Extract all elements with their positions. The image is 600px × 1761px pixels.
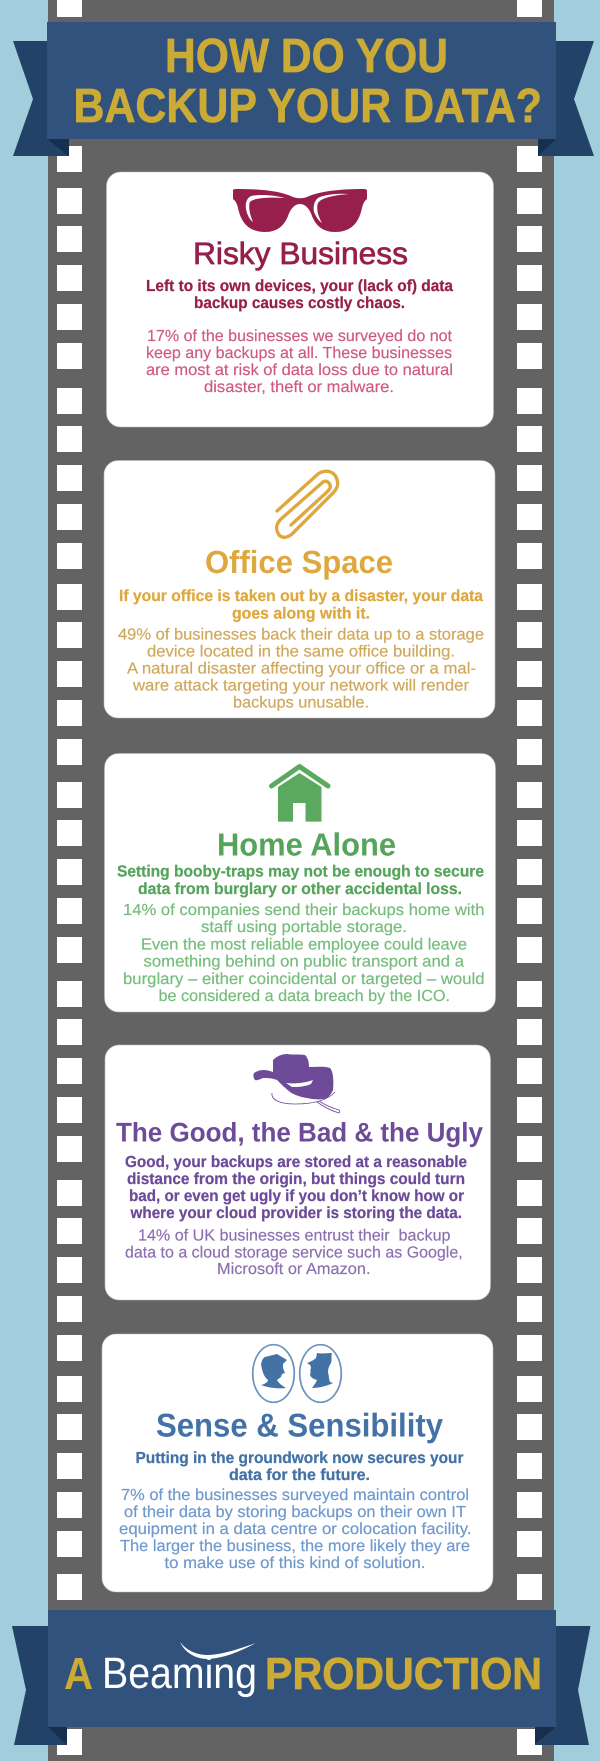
body text: Microsoft or Amazon. xyxy=(217,1261,370,1278)
intro text xyxy=(119,588,483,622)
logo: Beaming: Beaming xyxy=(102,1649,257,1698)
body text: A natural disaster affecting your office or a mal- xyxy=(127,660,476,678)
body text: 14% of UK businesses entrust their backup xyxy=(138,1228,451,1245)
intro text: distance from the origin, but things could turn xyxy=(127,1171,465,1188)
body text: backups unusable. xyxy=(233,695,369,712)
title: HOW DO YOU xyxy=(165,30,448,83)
body text: keep any backups at all. These businesses xyxy=(146,345,452,362)
heading: Home Alone xyxy=(217,827,396,863)
body text: something behind on public transport and a xyxy=(144,954,464,971)
body text: to make use of this kind of solution. xyxy=(164,1555,426,1572)
body text: are most at risk of data loss due to natural xyxy=(146,362,453,379)
intro text: Good, your backups are stored at a reasonable xyxy=(125,1154,467,1171)
intro text: backup causes costly chaos. xyxy=(194,295,405,312)
title: BACKUP YOUR DATA? xyxy=(74,80,542,133)
body text: be considered a data breach by the ICO. xyxy=(158,988,450,1005)
body text xyxy=(119,1487,471,1572)
body text: ware attack targeting your network will render xyxy=(132,678,470,695)
panel: The Good, the Bad and the Ugly xyxy=(105,1045,490,1300)
footer banner xyxy=(12,1610,590,1745)
body text xyxy=(118,626,484,712)
panel: Sense and Sensibility xyxy=(102,1334,493,1592)
intro text xyxy=(125,1154,467,1222)
icon: house xyxy=(272,766,328,822)
icon: sunglasses xyxy=(233,189,367,232)
heading: Office Space xyxy=(205,544,393,580)
intro text xyxy=(136,1450,464,1484)
intro text: data from burglary or other accidental loss. xyxy=(138,881,462,898)
heading: Risky Business xyxy=(193,236,408,271)
panel: Home Alone xyxy=(104,754,496,1012)
title xyxy=(74,30,542,133)
intro text: goes along with it. xyxy=(232,606,370,622)
body text: 49% of businesses back their data up to a storage xyxy=(118,626,484,644)
body text: 17% of the businesses we surveyed do not xyxy=(147,328,453,345)
body text: staff using portable storage. xyxy=(201,919,407,936)
heading: The Good, the Bad & the Ugly xyxy=(116,1118,483,1148)
intro text: where your cloud provider is storing the data. xyxy=(130,1205,462,1222)
body text xyxy=(123,902,484,1005)
icon: paperclip xyxy=(277,471,338,537)
body text: of their data by storing backups on their own IT xyxy=(124,1504,466,1521)
intro text xyxy=(146,278,453,312)
icon: cowboy hat xyxy=(253,1054,340,1113)
intro text: Setting booby-traps may not be enough to secure xyxy=(117,864,484,881)
body text: disaster, theft or malware. xyxy=(204,379,394,396)
title banner xyxy=(13,22,594,156)
intro text: data for the future. xyxy=(229,1467,370,1484)
panel: Office Space xyxy=(104,460,495,718)
intro text xyxy=(117,864,484,898)
panel: Risky Business xyxy=(106,172,494,427)
icon: cameo silhouettes xyxy=(253,1345,341,1402)
intro text: Left to its own devices, your (lack of) data xyxy=(146,278,453,295)
heading: Sense & Sensibility xyxy=(156,1407,444,1444)
body text: data to a cloud storage service such as Google, xyxy=(125,1245,463,1262)
body text: burglary – either coincidental or targeted – would xyxy=(123,971,484,988)
intro text: Putting in the groundwork now secures your xyxy=(136,1450,464,1467)
footer text: PRODUCTION: PRODUCTION xyxy=(265,1648,542,1699)
intro text: If your office is taken out by a disaster, your data xyxy=(119,588,483,605)
body text xyxy=(125,1228,463,1278)
body text xyxy=(146,328,453,396)
footer text: A: A xyxy=(64,1648,93,1699)
body text: equipment in a data centre or colocation facility. xyxy=(119,1521,471,1538)
intro text: bad, or even get ugly if you don’t know how or xyxy=(129,1188,464,1205)
body text: 14% of companies send their backups home with xyxy=(123,902,484,919)
body text: Even the most reliable employee could leave xyxy=(141,936,467,953)
body text: The larger the business, the more likely they are xyxy=(120,1538,470,1555)
body text: 7% of the businesses surveyed maintain control xyxy=(121,1487,469,1504)
body text: device located in the same office building. xyxy=(147,644,455,661)
